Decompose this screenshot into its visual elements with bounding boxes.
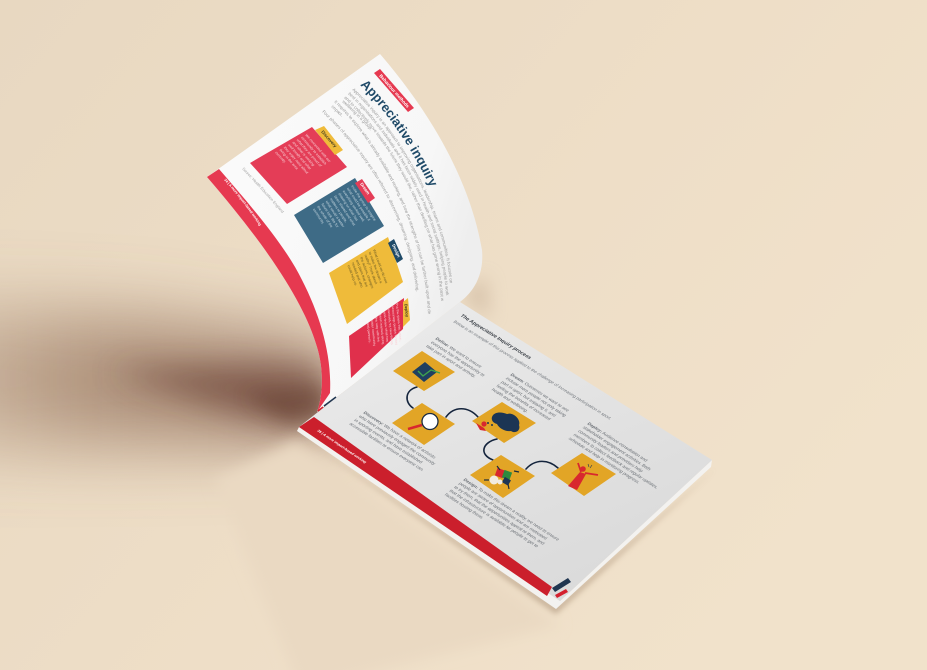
text: dream: include more people not only taking [505,376,568,418]
logo mark [552,578,571,598]
panel text: wider community [370,319,376,347]
panel text: What could we do now [372,248,388,285]
panel text: been shared and what [333,195,356,226]
text: define: Define: We want to ensure [434,337,483,369]
panel: design [329,237,403,324]
diamond: discovery [392,403,455,445]
panel text: needed and who [351,261,364,288]
intro text: It requires to explore what is already available and working, and how the strengths of this can be further built upon and developed for greater [334,100,431,314]
panel text: and share what has [383,311,389,343]
tag: design: Design [391,243,402,258]
tag: dream: Dream [359,182,371,196]
diamond: define [393,351,455,391]
icon: thought cloud [476,412,519,432]
panel: deploy [349,298,410,378]
diamond: deploy [551,453,616,496]
text: deploy: community leaders and providers help [577,429,645,473]
text: discovery: Discovery: We have a network of activists [362,411,437,459]
intro text: and to collectively move towards the future they would like, rather than dwelling on what has gone wrong in the past with good results [344,96,444,301]
icon: cheering person [568,463,598,490]
panel text: been learned along [379,313,385,345]
panel text: everything worked well, [342,190,366,223]
text: design: facilities hosting these. [443,492,485,520]
text: dream: part in sport, but enjoying it, and [500,380,558,418]
process connectors [407,387,558,469]
text: dream: Dream: Outcomes we want to see [509,373,570,412]
panel text: what could be possible if [346,187,371,222]
text: deploy: members to collect feedback and regular updates, [572,433,660,489]
page title: Appreciative inquiry [360,81,436,186]
panel text: drawing on what has [337,192,359,222]
intro text [322,88,452,314]
panel text: the actions, changes [359,256,374,289]
process intro: Below is an example of this process applied to the challenge of increasing participation in sport. [452,320,613,421]
panel text: the way with the [374,316,380,343]
icon: magnifier [408,414,438,430]
icon: checkmark [412,362,440,382]
text: discovery: accessible facilities to ensure everyone can. [348,422,426,472]
panel text: what they are proud of [296,138,323,167]
panel text: encourage people to stay [391,305,398,346]
intro text: wellbeing in a group. [342,100,371,130]
intro text: Four phases of appreciative inquiry are often referred to: discovering, dreaming, designing, and delivering. [322,110,419,292]
panel text: reality? Think about [364,254,378,285]
text: design: Design: To make this dream a reality, we need to ensure [462,478,561,541]
panel text: and what is working [291,141,316,167]
text: discovery: who have previously engaged the community [358,414,437,466]
icon: puzzle team [484,466,519,489]
panel text: well locally and what [287,143,312,170]
category tag [374,69,414,112]
panel: dream [294,178,384,263]
tag: discovery: Discovery [320,129,338,149]
panel text: matters to people, [329,197,348,223]
red side band [207,169,330,412]
panel text: to make the dream a [368,251,383,284]
floor lightening below the spine [215,441,560,670]
panel text: currently. [274,151,287,164]
tag: deploy: Deploy [404,304,410,318]
panel text: and plans that are [355,259,369,288]
curved upper page [207,54,482,412]
text: design: that the infrastructure is available for people to get to [448,489,540,548]
book page-block edge [297,427,712,609]
corner logo mark [318,397,336,411]
text: deploy: schedule and help in monitoring progress. [567,436,641,484]
intro text: impact. [331,105,342,116]
panel text: Put the plans into action, [395,302,402,342]
text: deploy: stakeholder engagement activities. Both [582,425,653,472]
diamond: design [470,455,535,498]
panel text: what would a better [325,200,346,229]
text: deploy: Deploy: Audience consultation and [586,422,649,462]
panel text: future look like for [320,203,340,229]
panel text: involved, try new things [387,308,394,346]
text: discovery: in sporting events, and have established [353,418,424,465]
source caption: Source: Health Education England [242,168,284,213]
panel: discovery [250,126,347,204]
text: define: everyone has the opportunity to [430,340,487,378]
diamond: dream [472,402,536,443]
category tag: Behaviour methods [378,73,411,109]
panel text: and partners. [366,322,372,344]
intro text: best in organisations and individuals and it has been widely used in health and social settings, helping people to work together, share ideas and energy [348,92,449,296]
text: design: people are aware of opportunities and are motivated [458,481,549,541]
text: dream: feeling the benefits of increased [495,384,553,421]
footer label: 35 | A more impact-based working [316,429,367,464]
intro text: Appreciative inquiry is an approach to improving organisations, leadership, teams and communities. It focuses on strengths rather than problems, bringing the [352,88,452,283]
lower page [299,302,712,601]
panel text: could help us. [347,264,358,287]
panel text: living in the area [278,148,299,170]
panel text: they enjoy most about [283,146,309,174]
panel text: We connected with our [304,133,332,163]
band label: 34 | A more impact-based working [224,178,261,226]
text: design: to try them, that the opportunities appeal to them, and [453,485,547,546]
panel text: community. [312,208,325,225]
process heading: The Appreciative Inquiry process [458,314,533,361]
cast shadow of lifted page [0,275,716,670]
panel text: the whole of the [316,205,334,228]
text: define: take part in sport and activity. [425,344,477,378]
panel text: Invite the group to imagine [350,184,377,222]
text: dream: health and wellbeing. [490,387,530,413]
footer band [299,417,552,596]
panel text: community to establish [300,136,327,165]
